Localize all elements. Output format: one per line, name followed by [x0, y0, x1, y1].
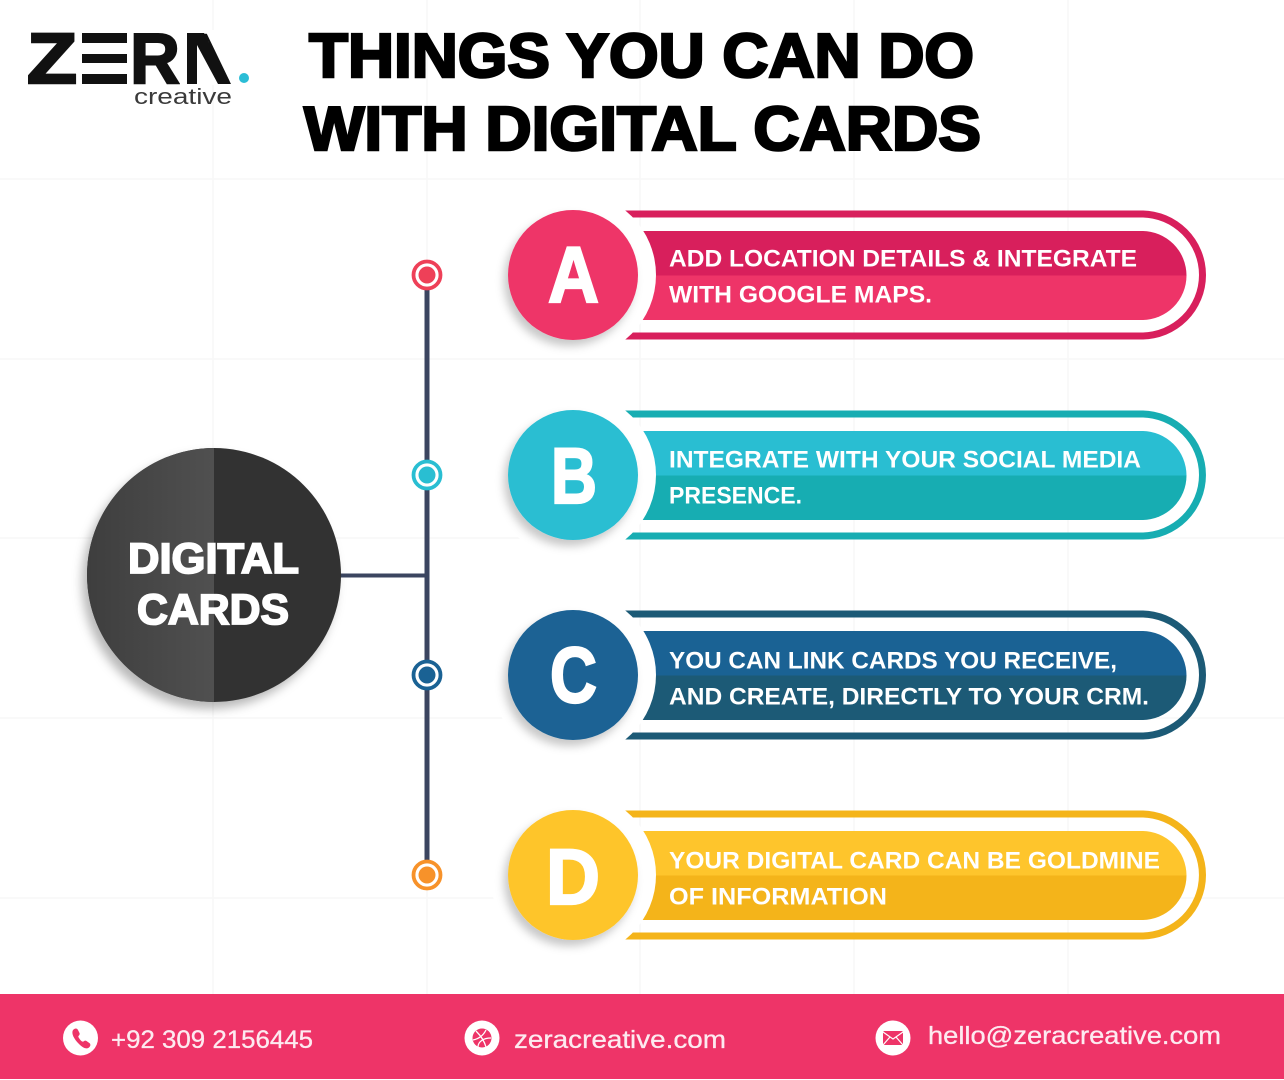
card B: B	[551, 431, 597, 520]
title: THINGS YOU CAN DO	[309, 22, 974, 91]
logo: ZERA creative: Z	[27, 20, 77, 99]
timeline dot A	[414, 262, 440, 288]
icon: globe	[464, 1020, 500, 1056]
logo: ZERA creative: creative	[134, 84, 232, 109]
footer bar	[0, 994, 1284, 1079]
card C	[490, 592, 1206, 758]
hub circle: digital cards: DIGITAL	[128, 535, 299, 583]
timeline dot B	[414, 462, 440, 488]
card D	[490, 792, 1206, 958]
icon: envelope	[876, 1020, 910, 1056]
card A: A	[548, 230, 599, 319]
title: WITH DIGITAL CARDS	[304, 95, 981, 164]
card D: D	[546, 832, 600, 921]
card D: OF INFORMATION	[669, 884, 887, 910]
card A: ADD LOCATION DETAILS & INTEGRATE	[669, 246, 1137, 272]
card A	[490, 192, 1206, 358]
card C: C	[550, 630, 597, 719]
logo: ZERA creative	[27, 20, 249, 109]
card B: INTEGRATE WITH YOUR SOCIAL MEDIA	[669, 446, 1141, 474]
card B	[490, 392, 1206, 558]
phone number: +92 309 2156445	[111, 1026, 313, 1054]
logo: ZERA creative: A	[185, 20, 232, 99]
connector: timeline lines	[340, 275, 427, 875]
email: hello@zeracreative.com	[928, 1022, 1221, 1050]
card C: YOU CAN LINK CARDS YOU RECEIVE,	[669, 648, 1117, 674]
logo: ZERA creative: E	[78, 20, 127, 99]
card B: PRESENCE.	[669, 482, 802, 510]
hub circle: digital cards	[87, 448, 341, 702]
card D: YOUR DIGITAL CARD CAN BE GOLDMINE	[669, 848, 1160, 874]
hub circle: digital cards: CARDS	[137, 586, 289, 634]
timeline dot C	[414, 662, 440, 688]
icon: phone	[63, 1020, 98, 1056]
title	[304, 22, 981, 164]
card A: WITH GOOGLE MAPS.	[669, 282, 932, 308]
card C: AND CREATE, DIRECTLY TO YOUR CRM.	[669, 684, 1149, 710]
timeline dot D	[414, 862, 440, 888]
logo: ZERA creative: R	[130, 20, 180, 99]
website: zeracreative.com	[514, 1026, 726, 1054]
